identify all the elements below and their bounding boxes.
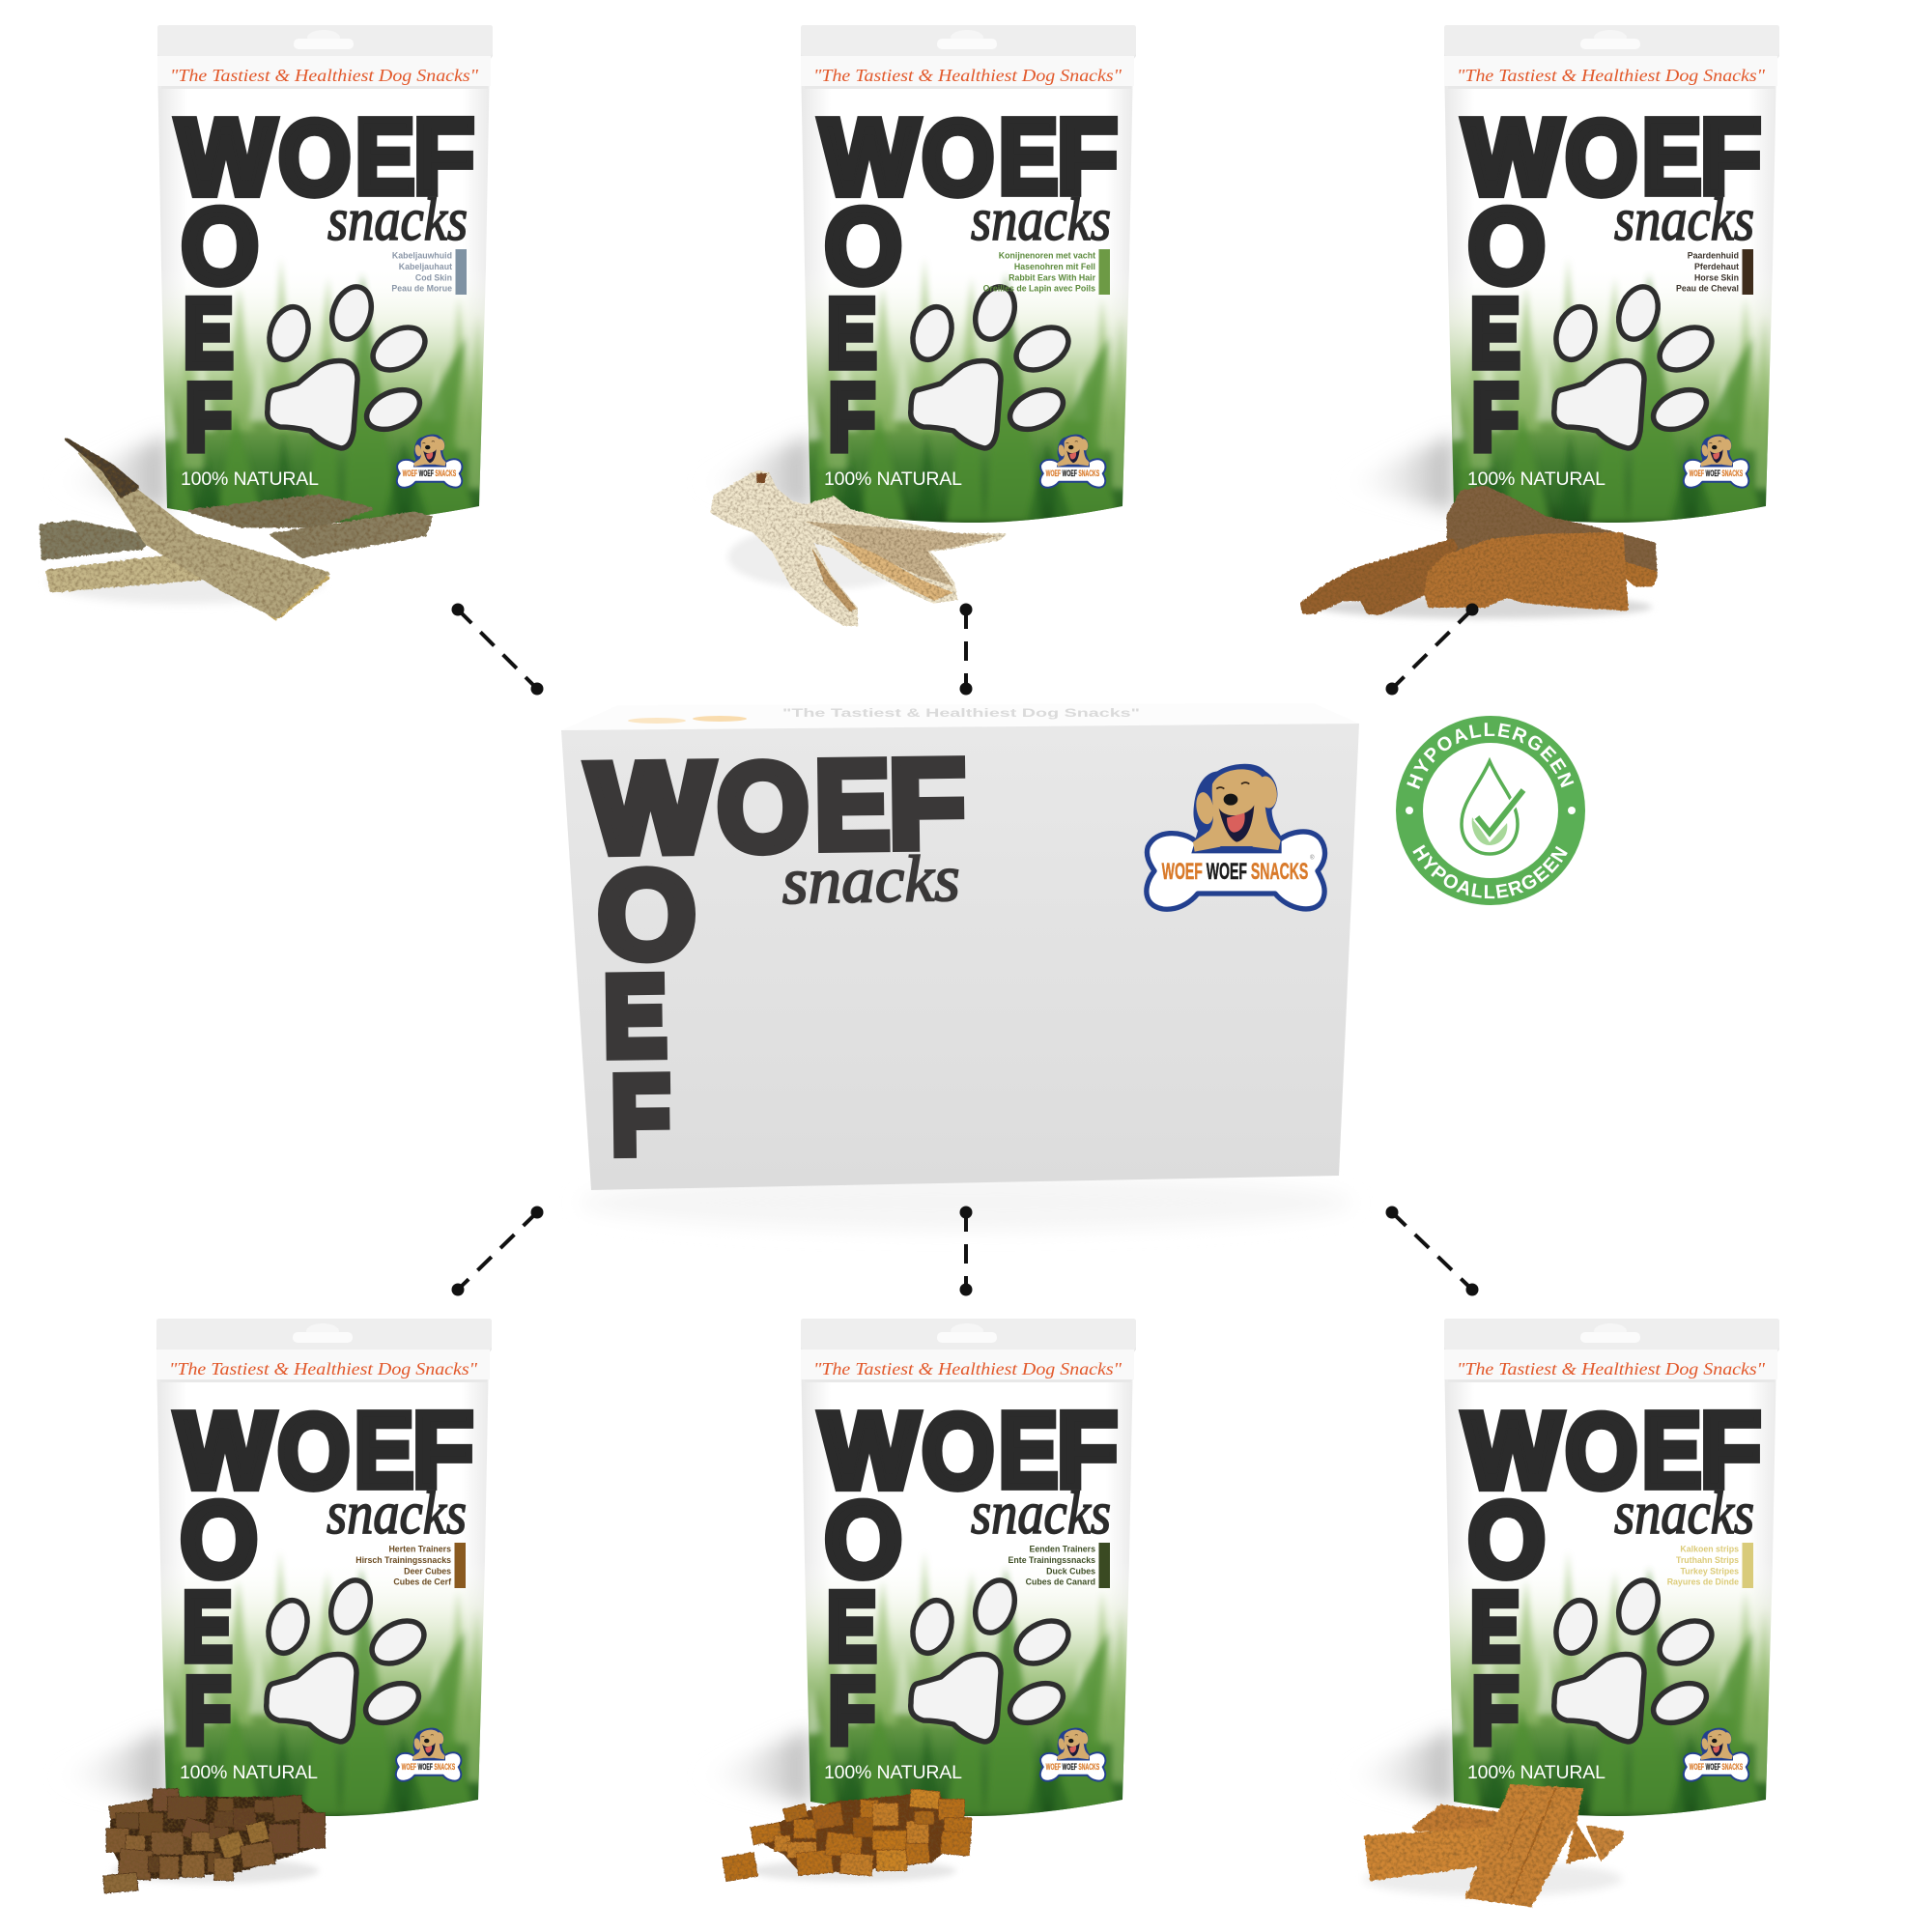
box wordmark: O: [596, 844, 697, 985]
brand wordmark: F: [413, 97, 474, 216]
box wordmark: F: [611, 1052, 670, 1177]
connector: deer cubes to box: [452, 1206, 543, 1296]
product label: Cubes de Cerf: [393, 1577, 451, 1587]
brand wordmark: O: [1565, 98, 1637, 216]
pouch artwork: [50, 1319, 492, 1821]
tagline: "The Tastiest & Healthiest Dog Snacks": [1457, 1359, 1765, 1378]
brand wordmark: E: [354, 1389, 414, 1510]
brand wordmark: O: [1565, 1391, 1637, 1510]
box snacks script: snacks: [781, 841, 960, 918]
badge: hypoallergeen: HYPOALLERGEEN: [1406, 723, 1575, 789]
product label: Hasenohren mit Fell: [1014, 262, 1095, 271]
badge: hypoallergeen: [1396, 716, 1585, 905]
panel: pouch turkey strips: [1338, 1319, 1779, 1821]
brand wordmark: E: [1470, 279, 1520, 386]
logo: [1684, 435, 1748, 488]
brand wordmark: W: [177, 1392, 274, 1509]
box wordmark: [588, 732, 970, 1178]
brand wordmark: E: [1642, 96, 1702, 216]
brand wordmark: F: [1472, 1659, 1519, 1763]
brand wordmark: E: [1642, 1389, 1702, 1510]
product label: [1676, 249, 1753, 295]
snacks script: snacks: [1614, 1481, 1754, 1547]
natural claim: 100% NATURAL: [1467, 1762, 1606, 1783]
product label: Oreilles de Lapin avec Poils: [983, 284, 1095, 294]
brand wordmark: [1464, 96, 1761, 469]
logo: [1040, 435, 1105, 488]
snacks script: snacks: [327, 1481, 467, 1547]
logo: [396, 1728, 461, 1781]
box top face: [561, 703, 1359, 730]
product label: Paardenhuid: [1688, 251, 1739, 261]
product label: Horse Skin: [1694, 272, 1739, 282]
snack: turkey strips: [1364, 1784, 1625, 1907]
brand wordmark: O: [824, 186, 902, 306]
product label: Deer Cubes: [404, 1566, 451, 1576]
brand wordmark: F: [1700, 97, 1761, 216]
pouch artwork: [1338, 1319, 1779, 1821]
panel: pouch horse skin: [1338, 25, 1779, 527]
brand wordmark: F: [1057, 1390, 1118, 1510]
connector: duck cubes to box: [960, 1206, 972, 1296]
product label: Peau de Morue: [391, 284, 452, 294]
product label: Truthahn Strips: [1676, 1555, 1739, 1565]
brand wordmark: F: [412, 1390, 473, 1510]
box wordmark: E: [813, 734, 891, 876]
brand wordmark: O: [922, 98, 994, 216]
brand wordmark: [821, 96, 1118, 469]
product label: Hirsch Trainingssnacks: [355, 1555, 451, 1565]
panel: central gift box: [561, 703, 1359, 1230]
product label: Rabbit Ears With Hair: [1009, 272, 1096, 282]
brand wordmark: O: [824, 1480, 902, 1600]
brand wordmark: W: [821, 1392, 919, 1509]
natural claim: 100% NATURAL: [180, 1762, 319, 1783]
product label: [1667, 1543, 1753, 1588]
brand wordmark: E: [827, 1573, 876, 1680]
product label: [1009, 1543, 1110, 1588]
box wordmark: E: [603, 952, 667, 1079]
box logo: [1147, 764, 1325, 909]
logo: WOEF WOEF SNACKS: [1046, 469, 1099, 478]
connector: horse skin to box: [1385, 603, 1478, 696]
connector: turkey strips to box: [1385, 1206, 1478, 1296]
snack: duck cubes: [722, 1789, 972, 1882]
brand wordmark: W: [821, 99, 919, 215]
panel: pouch duck cubes: [695, 1319, 1136, 1821]
tagline: "The Tastiest & Healthiest Dog Snacks": [813, 1359, 1122, 1378]
logo: [397, 435, 462, 488]
product label: Kalkoen strips: [1680, 1545, 1739, 1554]
snack: rabbit ears: [712, 471, 1005, 625]
natural claim: 100% NATURAL: [824, 1762, 963, 1783]
brand wordmark: O: [1467, 186, 1546, 306]
brand wordmark: O: [180, 1480, 258, 1600]
brand wordmark: E: [827, 279, 876, 386]
brand wordmark: F: [185, 365, 232, 469]
box wordmark: F: [887, 732, 967, 874]
product label: Cod Skin: [415, 272, 452, 282]
tagline: "The Tastiest & Healthiest Dog Snacks": [169, 1359, 477, 1378]
brand wordmark: O: [277, 1391, 350, 1510]
pouch artwork: [1338, 25, 1779, 527]
brand wordmark: [178, 96, 474, 469]
logo: WOEF WOEF SNACKS: [1690, 1762, 1743, 1772]
box top face: "The Tastiest & Healthiest Dog Snacks": [782, 706, 1140, 720]
pouch artwork: [51, 25, 493, 527]
product label: Konijnenoren met vacht: [999, 251, 1095, 261]
brand wordmark: F: [1472, 365, 1519, 469]
box logo: ®: [1310, 854, 1315, 861]
product label: Kabeljauwhuid: [392, 251, 452, 261]
product label: Eenden Trainers: [1030, 1545, 1095, 1554]
snacks script: snacks: [327, 187, 468, 253]
brand wordmark: F: [1057, 97, 1118, 216]
pouch artwork: [695, 25, 1136, 527]
brand wordmark: F: [1700, 1390, 1761, 1510]
logo: WOEF WOEF SNACKS: [1690, 469, 1743, 478]
brand wordmark: W: [1464, 99, 1562, 215]
badge: hypoallergeen: HYPOALLERGEEN: [1412, 844, 1568, 898]
brand wordmark: O: [1467, 1480, 1546, 1600]
connector: rabbit ears to box: [960, 603, 972, 696]
brand wordmark: O: [922, 1391, 994, 1510]
brand wordmark: E: [355, 96, 415, 216]
product label: [983, 249, 1110, 295]
product label: Rayures de Dinde: [1667, 1577, 1739, 1587]
natural claim: 100% NATURAL: [824, 469, 963, 490]
brand wordmark: E: [184, 279, 233, 386]
logo: [1040, 1728, 1105, 1781]
icon: water drop with check: [1462, 761, 1523, 854]
brand wordmark: [177, 1389, 473, 1763]
box wordmark: O: [716, 736, 810, 878]
box wordmark: W: [588, 737, 714, 878]
brand wordmark: E: [999, 96, 1059, 216]
snacks script: snacks: [971, 1481, 1111, 1547]
product label: Ente Trainingssnacks: [1009, 1555, 1095, 1565]
brand wordmark: E: [999, 1389, 1059, 1510]
connector: cod skin to box: [452, 603, 543, 696]
product label: [391, 249, 467, 295]
panel: pouch cod skin: [51, 25, 493, 527]
brand wordmark: E: [1470, 1573, 1520, 1680]
product label: Herten Trainers: [388, 1545, 451, 1554]
brand wordmark: F: [829, 365, 875, 469]
logo: WOEF WOEF SNACKS: [403, 469, 456, 478]
logo: WOEF WOEF SNACKS: [1046, 1762, 1099, 1772]
snacks script: snacks: [1614, 187, 1754, 253]
panel: pouch deer cubes: [50, 1319, 492, 1821]
panel: pouch rabbit ears: [695, 25, 1136, 527]
box logo: WOEF WOEF SNACKS: [1162, 859, 1308, 885]
product label: Peau de Cheval: [1676, 284, 1739, 294]
brand wordmark: O: [181, 186, 259, 306]
snack: horse skin: [1302, 488, 1655, 618]
product label: Turkey Stripes: [1681, 1566, 1739, 1576]
brand wordmark: F: [185, 1659, 231, 1763]
brand wordmark: W: [178, 99, 275, 215]
brand wordmark: O: [278, 98, 351, 216]
product label: Duck Cubes: [1046, 1566, 1095, 1576]
brand wordmark: F: [829, 1659, 875, 1763]
tagline: "The Tastiest & Healthiest Dog Snacks": [813, 66, 1122, 85]
logo: [1684, 1728, 1748, 1781]
snacks script: snacks: [971, 187, 1111, 253]
natural claim: 100% NATURAL: [181, 469, 320, 490]
pouch artwork: [695, 1319, 1136, 1821]
box front face: [561, 724, 1359, 1190]
brand wordmark: [821, 1389, 1118, 1763]
logo: WOEF WOEF SNACKS: [402, 1762, 455, 1772]
snack: deer cubes: [103, 1789, 326, 1893]
tagline: "The Tastiest & Healthiest Dog Snacks": [1457, 66, 1765, 85]
natural claim: 100% NATURAL: [1467, 469, 1606, 490]
brand wordmark: E: [183, 1573, 232, 1680]
product label: [355, 1543, 466, 1588]
tagline: "The Tastiest & Healthiest Dog Snacks": [170, 66, 478, 85]
product label: Pferdehaut: [1694, 262, 1739, 271]
brand wordmark: W: [1464, 1392, 1562, 1509]
snack: cod skin strips: [41, 440, 431, 619]
product label: Cubes de Canard: [1026, 1577, 1095, 1587]
brand wordmark: [1464, 1389, 1761, 1763]
product label: Kabeljauhaut: [399, 262, 452, 271]
